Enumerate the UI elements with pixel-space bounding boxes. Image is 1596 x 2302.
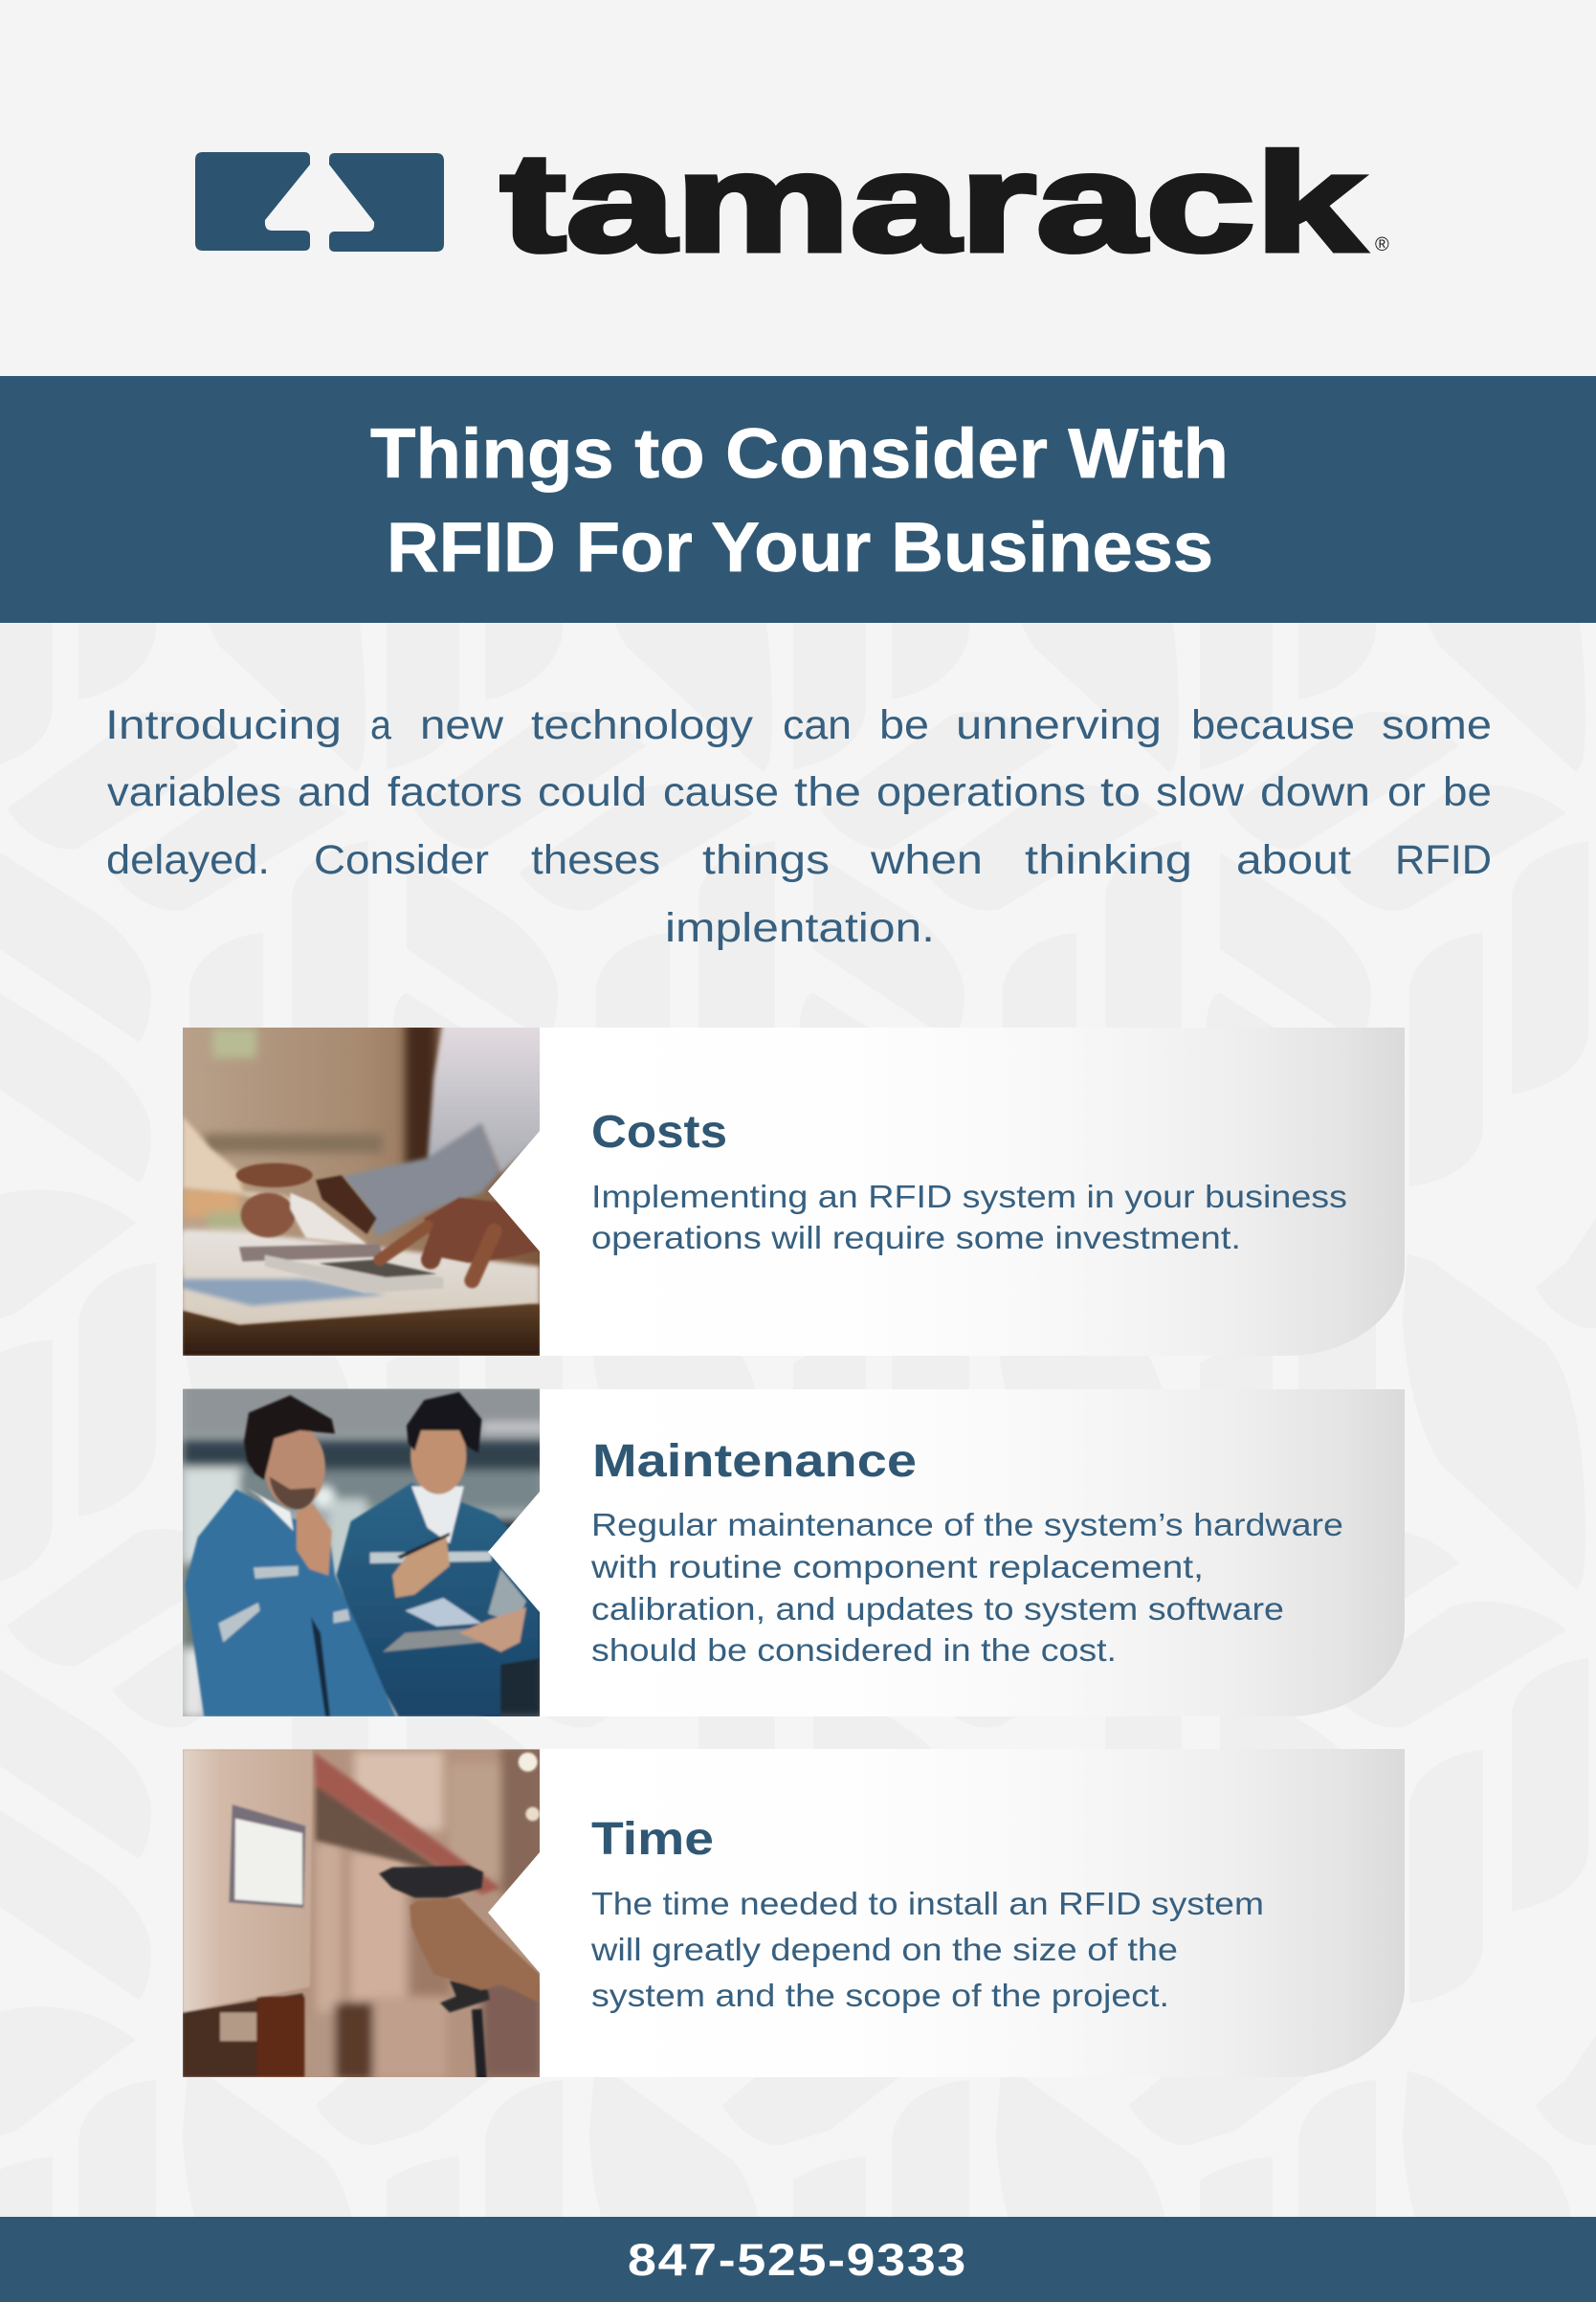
card: costs	[488, 1028, 1405, 1356]
intro paragraph: down	[1260, 769, 1370, 815]
intro paragraph: RFID	[1395, 837, 1492, 883]
logo: tamarack	[195, 124, 1389, 280]
body text: costs	[591, 1180, 1347, 1256]
photo: two technicians in blue uniforms	[183, 1384, 546, 1719]
phone number: 847-525-9333	[628, 2234, 967, 2285]
intro paragraph: theses	[531, 837, 660, 883]
card: maintenance	[488, 1389, 1405, 1716]
body text: time: will greatly depend on the size of the	[590, 1933, 1178, 1968]
panel: time	[183, 1744, 1405, 2079]
panel: maintenance	[183, 1384, 1405, 1719]
intro paragraph: when	[870, 837, 983, 883]
body text: costs: Implementing an RFID system in your business	[591, 1180, 1347, 1215]
body text: time	[590, 1887, 1264, 2014]
intro paragraph: or	[1387, 769, 1426, 815]
body text: maintenance: Regular maintenance of the system’s hardware	[591, 1508, 1343, 1543]
body text: maintenance	[590, 1508, 1343, 1669]
photo: calculator and paperwork	[183, 1021, 545, 1356]
card: time	[488, 1749, 1405, 2077]
panel: costs	[183, 1021, 1405, 1356]
heading: maintenance: Maintenance	[592, 1436, 917, 1487]
intro paragraph: slow	[1156, 769, 1245, 815]
intro paragraph: unnerving	[956, 702, 1162, 748]
intro paragraph: technology	[531, 702, 754, 748]
intro paragraph: could	[538, 769, 647, 815]
intro paragraph: to	[1100, 769, 1141, 815]
intro paragraph: be	[1443, 769, 1492, 815]
intro paragraph: operations	[876, 769, 1086, 815]
intro paragraph: Consider	[314, 837, 489, 883]
intro paragraph: about	[1236, 837, 1351, 883]
body text: maintenance: calibration, and updates to system software	[591, 1592, 1284, 1627]
heading: time: Time	[591, 1814, 714, 1865]
intro paragraph: because	[1191, 702, 1355, 748]
body text: maintenance: should be considered in the cost.	[591, 1633, 1117, 1669]
logo icon	[195, 152, 444, 252]
intro paragraph: Introducing	[105, 702, 342, 748]
heading: costs: Costs	[591, 1107, 727, 1158]
intro paragraph: the	[794, 769, 861, 815]
body text: maintenance: with routine component replacement,	[590, 1550, 1204, 1585]
photo: hand with barcode scanner in warehouse	[183, 1744, 545, 2079]
intro paragraph: variables	[107, 769, 281, 815]
intro paragraph: thinking	[1025, 837, 1192, 883]
intro paragraph: delayed.	[106, 837, 270, 883]
title banner	[0, 376, 1596, 623]
body text: time: The time needed to install an RFID system	[591, 1887, 1264, 1922]
intro paragraph: things	[702, 837, 830, 883]
intro paragraph	[105, 702, 1492, 951]
body text: costs: operations will require some investment.	[591, 1221, 1241, 1256]
intro paragraph: can	[783, 702, 852, 748]
intro paragraph: new	[420, 702, 504, 748]
intro paragraph: be	[879, 702, 929, 748]
intro paragraph: some	[1382, 702, 1492, 748]
intro paragraph: implentation.	[665, 905, 935, 951]
intro paragraph: factors	[388, 769, 522, 815]
intro paragraph: cause	[663, 769, 779, 815]
intro paragraph: a	[370, 702, 391, 748]
body text: time: system and the scope of the project.	[591, 1979, 1169, 2014]
registered mark: ®	[1375, 234, 1389, 255]
title line 1: Things to Consider With	[370, 415, 1229, 493]
footer bar	[0, 2217, 1596, 2302]
title line 2: RFID For Your Business	[387, 509, 1213, 587]
intro paragraph: and	[298, 769, 371, 815]
logo wordmark: tamarack	[500, 124, 1365, 280]
